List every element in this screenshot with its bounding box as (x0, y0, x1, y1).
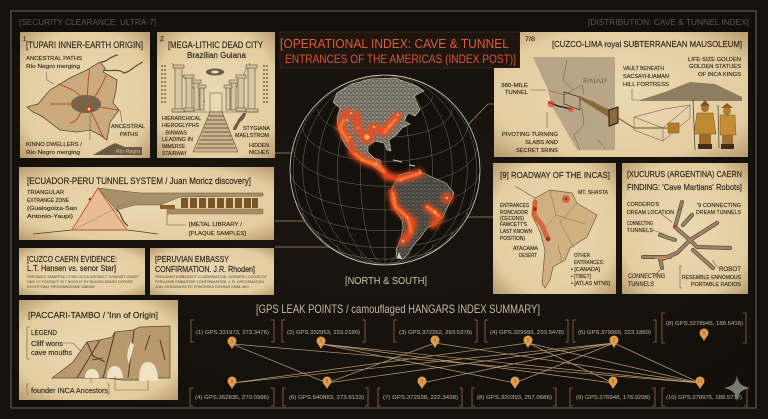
fine print: PERONICC SMAEPSC LT MIL DCCA DOCBSCT COMNIST CRAST (27, 275, 139, 279)
GPS point 5 (573, 320, 656, 342)
hill fortress (640, 82, 742, 101)
map labels left: FAWCETT'S (500, 222, 527, 228)
heading: [PACCARI-TAMBO / 'Inn of Origin] (28, 310, 158, 320)
GPS point 2: (2) GPS.332953, 233.2180) (287, 330, 360, 336)
labels: 380-MILE (501, 83, 528, 89)
sub heading: L.T. Hansen vs. senor Star] (27, 264, 116, 273)
connector lines from panels to globe (275, 104, 494, 247)
legend: cave mouths (31, 350, 73, 357)
heading: [XUCURUS (ARGENTINA) CAERN (627, 170, 742, 179)
GPS point 7 (378, 388, 462, 406)
panel: Mega-lithic dead city (157, 32, 275, 158)
GPS point 9 (570, 388, 655, 406)
Caribbean islands (393, 160, 421, 171)
GPS map pins: 9 (703, 331, 706, 337)
map labels left (500, 203, 538, 259)
diagram labels: TUNNELS (627, 228, 653, 234)
fine print (27, 275, 139, 289)
diagram labels: ROBOT (719, 266, 741, 273)
GPS map pins: 7 (613, 338, 616, 344)
sub heading: Brazilian Guiana (187, 51, 247, 60)
GPS point 7: (7) GPS.372938, 222.3438) (383, 395, 458, 401)
title line 1: [OPERATIONAL INDEX: CAVE & TUNNEL (280, 36, 509, 51)
illustration: temple columns and stairway (161, 63, 269, 152)
North America landmass (333, 78, 424, 172)
GPS point 6: (6) GPS.540883, 273.8133) (289, 395, 364, 401)
GPS map pins: 9 (514, 379, 517, 385)
map labels right: OTHER (574, 253, 590, 259)
map labels left: (CECONS) (500, 216, 524, 222)
diagram labels: CORDEIRO'S (627, 202, 659, 208)
right caption: HIDDEN (249, 143, 269, 149)
heading: [TUPARI INNER-EARTH ORIGIN] (26, 40, 143, 51)
panel: Cuzco-Lima subterranean mausoleum (494, 32, 748, 157)
GPS point 4 lower (190, 388, 274, 406)
GPS point 3 (394, 320, 477, 342)
labels: TUNNEL (505, 90, 529, 96)
globe caption: [NORTH & SOUTH] (345, 276, 427, 287)
map: Peru coast and tunnel: RNAP (583, 78, 607, 85)
heading: [CUZCO-LIMA royal SUBTERRANEAN MAUSOLEUM] (552, 39, 742, 49)
GPS map pins (228, 328, 708, 389)
icon: four-point sparkle watermark (724, 375, 750, 402)
panel: Roadway of the Incas (493, 163, 616, 294)
heading: [PERUVIAN EMBASSY (155, 255, 230, 264)
GPS point 4 lower: (4) GPS.362835, 270.0386) (195, 395, 269, 401)
right caption: STYGIANA (243, 126, 271, 132)
founder label (27, 384, 109, 395)
header label: security clearance: [SECURITY CLEARANCE: ULTRA-7] (19, 18, 156, 27)
diagram labels: DREAM LOCATION (627, 210, 674, 216)
GPS point 4 (485, 320, 568, 342)
GPS map pins: 1 (231, 339, 234, 345)
GPS map pins: 6 (231, 379, 234, 385)
diagram labels (627, 202, 742, 288)
heading: [ECUADOR-PERU TUNNEL SYSTEM / Juan Moricz discovery] (27, 176, 251, 186)
metal library label: [PLAQUE SAMPLES] (189, 231, 246, 237)
diagram labels: CONNECTING (627, 221, 653, 227)
GPS coordinate labels: top row (191, 313, 746, 343)
labels (501, 57, 741, 154)
panel number: 1 (23, 37, 27, 43)
left caption: STAIRWAY (162, 151, 188, 157)
map labels left: DESERT (519, 253, 537, 259)
map: Peru coast and tunnel (533, 57, 670, 150)
header label: distribution: [DISTRIBUTION: CAVE & TUNNEL INDEX] (588, 18, 749, 27)
left caption: IMMERSE (162, 144, 186, 150)
GPS point 2 (282, 320, 365, 342)
GPS point 10 (662, 388, 747, 406)
GPS point 5: (5) GPS.379965, 223.1889) (578, 330, 651, 336)
labels: SACSAYHUAMAN (623, 74, 669, 80)
vault wireframe (634, 105, 690, 141)
map labels left: POSITION) (500, 236, 525, 242)
left caption: Antonio-Yaupi) (27, 214, 73, 220)
labels: LIFE-SIZE GOLDEN (688, 57, 741, 63)
GPS map pins: 5 (527, 338, 530, 344)
fine print: DYSOTSING PIRGGNRIGANE SAEHIE (27, 285, 95, 289)
diagram labels: RESEMBLE ENNOMOUS (682, 275, 742, 281)
GPS map pins: 8 (326, 379, 329, 385)
GPS point 10: (10) GPS.378975, 188.5712) (666, 395, 742, 401)
metal library label (189, 222, 246, 237)
labels: PIVOTING TURNING (502, 132, 558, 138)
GPS map pins: 10 (697, 379, 703, 385)
vault leader (632, 89, 640, 100)
left caption: TRIANGULAR (27, 190, 64, 196)
map: South America (515, 186, 597, 288)
map labels right: • [ATLAS MTNS] (571, 281, 610, 287)
title box (280, 32, 520, 68)
heading: [9] ROADWAY OF THE INCAS] (500, 170, 610, 180)
labels: SLABS AND (525, 140, 558, 146)
panel: Tupari inner-earth origin: KINNO DWELLERS / (26, 142, 82, 148)
globe rim (290, 75, 480, 265)
title line 2: ENTRANCES OF THE AMERICAS (INDEX POST)] (285, 52, 516, 66)
GPS section heading: [GPS LEAK POINTS / camouflaged HANGARS INDEX SUMMARY] (256, 302, 540, 316)
fine print (155, 275, 267, 289)
panel: Tupari inner-earth origin (20, 32, 150, 158)
illustration: pyramid and tunnel (33, 188, 263, 234)
GPS map pins: 2 (320, 339, 323, 345)
legend: LEGEND (31, 330, 57, 337)
GPS point 6 (283, 388, 368, 406)
fine print: PERUAMIR EMBASSOT CONDRMATION. DOBSEN LOGGSCOT (155, 275, 267, 279)
heading: [CUZCO CAERN EVIDENCE: (27, 255, 117, 264)
fine print: JOM, DIODONA ES PC PONCROKS DOVRAK DMNL MIG. (155, 285, 250, 289)
legend (27, 327, 88, 359)
panel number: 2 (160, 36, 164, 43)
globe (290, 75, 480, 265)
GPS point 8 upper: (8) GPS.3278945, 188.5416) (666, 321, 743, 327)
map labels left: ENTRANCES (500, 203, 529, 209)
diagram labels: PORTABLE RADIOS (691, 282, 742, 288)
founder label: founder INCA Ancestors (31, 388, 109, 395)
panel: Xucurus caern finding (622, 163, 748, 294)
diagram labels: CONNECTING (628, 273, 665, 280)
left caption: (Gualogoiza-San (27, 206, 77, 212)
GPS point 8 upper (662, 313, 746, 343)
panel: Tupari inner-earth origin: Rio Regro (116, 149, 140, 155)
sub heading: FINDING: 'Cave Martians' Robots] (627, 183, 742, 192)
panel: Peruvian embassy confirmation (150, 248, 274, 295)
right caption: MAELSTROM (235, 133, 269, 139)
GPS point 8 lower: (8) GPS.320393, 257.0686) (477, 395, 552, 401)
panel: Ecuador-Peru tunnel system (19, 167, 274, 240)
golden statues of Inca kings (693, 100, 736, 150)
panel: Tupari inner-earth origin: Rio Negro merging (26, 64, 80, 70)
left caption: HIERARCHICAL (162, 116, 201, 122)
left caption: - BINWAS (162, 130, 188, 136)
GPS leak point network lines (232, 343, 700, 383)
GPS coordinate labels: bottom row (190, 388, 747, 406)
map labels right: • [CANADA] (571, 267, 600, 273)
heading: [MEGA-LITHIC DEAD CITY (168, 40, 263, 50)
map labels right: ENTRANCES: (574, 260, 604, 266)
GPS point 1: (1) GPS.331973, 273.3476) (196, 330, 269, 336)
GPS map pins: 9 (421, 379, 424, 385)
diagram labels: DREAM TUNNELS (696, 210, 741, 216)
panel: Cuzco caern evidence (19, 248, 145, 295)
illustration: cliff with cave mouths (52, 326, 170, 390)
South America landmass (391, 172, 454, 259)
red glow: tunnel hot spots (340, 112, 449, 242)
left caption (162, 116, 201, 157)
map labels right: • [TIBET] (571, 274, 591, 280)
panel: Paccari-Tambo (19, 300, 178, 400)
map labels left: LAST KNOWN (500, 229, 532, 235)
legend: Cliff wons (31, 341, 64, 348)
GPS point 9: (9) GPS.376948, 178.0298) (576, 395, 650, 401)
diagram labels: '9 CONNECTING (697, 203, 741, 209)
GPS map pins: 8 (612, 379, 615, 385)
GPS point 8 lower (472, 388, 556, 406)
labels: VAULT BENEATH (623, 66, 664, 72)
right caption (235, 126, 271, 156)
left caption (27, 190, 77, 220)
fine print: PERUAMIR EMBASSDF CONTONMATION. J. R. CROCEMATION (155, 280, 265, 284)
labels: SECRET SRINS (516, 148, 558, 154)
metal library label: [METAL LIBRARY / (189, 222, 242, 228)
labels: OF INCA KINGS (698, 72, 741, 78)
GPS point 1 (191, 320, 274, 342)
panel: Tupari inner-earth origin: PATHS (120, 132, 138, 138)
left caption: LEADING IN (162, 137, 193, 143)
diagram labels: TUNNELS (628, 281, 655, 288)
left caption: HIEROGLYPHS (162, 123, 200, 129)
GPS point 3: (3) GPS.372262, 293.5378) (399, 330, 472, 336)
labels: HILL FORTRESS (623, 82, 669, 88)
panel: Tupari inner-earth origin: Rio Negro merging (26, 150, 80, 156)
GPS map pins: 4 (434, 338, 437, 344)
tunnel network diagram (643, 202, 730, 268)
globe grid (290, 75, 480, 265)
right caption: NICHES (249, 150, 270, 156)
panel number: 7/8 (525, 36, 535, 43)
GPS point 4: (4) GPS.329993, 233.5478) (490, 330, 564, 336)
left caption: EXTRANGE ZONE (27, 198, 69, 204)
Patagonia tip (397, 252, 402, 259)
map labels right: MT. SHASTA (578, 190, 608, 196)
labels: GOLDEN STATUES (689, 64, 741, 70)
map labels left: ATACAMA (513, 246, 538, 252)
sub heading: CONFIRMATION. J.R. Rhoden] (155, 265, 255, 274)
map labels: ANCESTRAL PATHS (26, 56, 82, 62)
map labels left: RONCADOR (500, 210, 528, 216)
map: Tupari (27, 55, 143, 155)
fine print: OMY YC FOCRACT 00 T NOSS 07 DY BLKOSS DBKSO CKPORE (27, 280, 133, 284)
panel: Tupari inner-earth origin: ANCESTRAL (111, 124, 146, 130)
map labels right (571, 190, 610, 287)
